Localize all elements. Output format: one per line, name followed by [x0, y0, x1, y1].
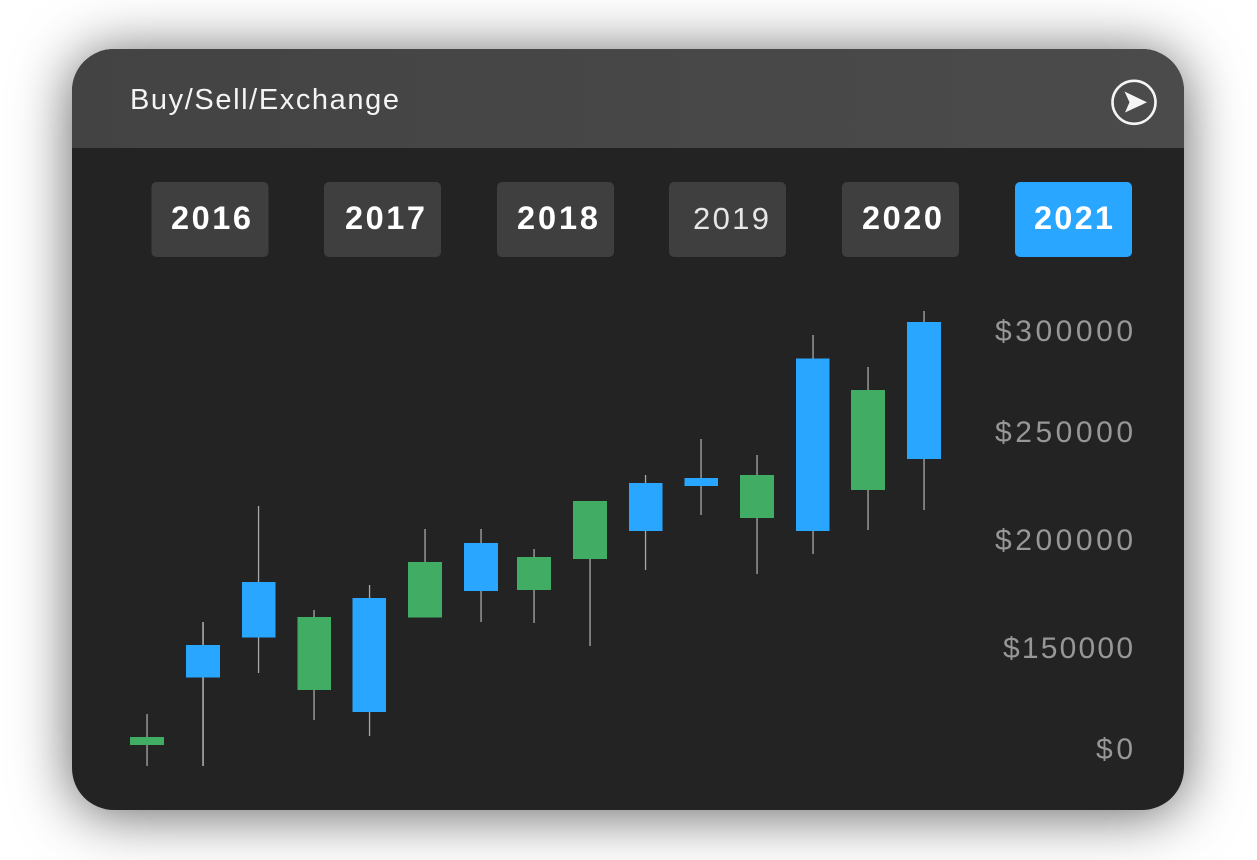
button: 2016: 2016	[171, 200, 251, 236]
candle 14	[851, 367, 885, 530]
label: $300000: $300000	[995, 315, 1133, 348]
candle 7	[464, 529, 498, 622]
label: $250000: $250000	[995, 416, 1133, 449]
button: 2017	[324, 182, 441, 257]
label: $0: $0	[1096, 733, 1133, 766]
year selector buttons	[152, 182, 1132, 257]
button: 2020	[842, 182, 959, 257]
candle 5	[352, 585, 386, 736]
candle 11	[684, 439, 718, 515]
candle 4	[298, 610, 331, 720]
label: $200000: $200000	[995, 524, 1133, 557]
candle 9	[573, 501, 607, 646]
button: 2018	[497, 182, 614, 257]
candle 15	[907, 311, 941, 510]
candle 6	[408, 529, 442, 618]
button: 2020: 2020	[862, 200, 942, 236]
candle 8	[517, 549, 551, 623]
candle 10	[629, 475, 662, 570]
button: 2021 active	[1015, 182, 1132, 257]
candle 13	[796, 335, 830, 554]
button: 2021 active: 2021	[1034, 200, 1113, 236]
header bar	[72, 49, 1184, 148]
button: 2019	[669, 182, 786, 257]
candle 1	[130, 714, 164, 766]
candle 3	[242, 506, 276, 673]
button: 2016	[152, 182, 268, 257]
candlestick chart	[130, 311, 941, 766]
button: 2017: 2017	[345, 200, 425, 236]
heading: Buy/Sell/Exchange: Buy/Sell/Exchange	[130, 84, 399, 116]
panel: trading card	[72, 49, 1184, 810]
label: $150000: $150000	[1003, 632, 1133, 665]
price axis labels	[995, 315, 1133, 766]
candle 12	[740, 455, 774, 574]
button: 2018: 2018	[517, 200, 598, 236]
button: 2019: 2019	[693, 201, 769, 236]
icon: play arrow in circle	[1112, 81, 1156, 124]
candle 2	[186, 622, 220, 766]
